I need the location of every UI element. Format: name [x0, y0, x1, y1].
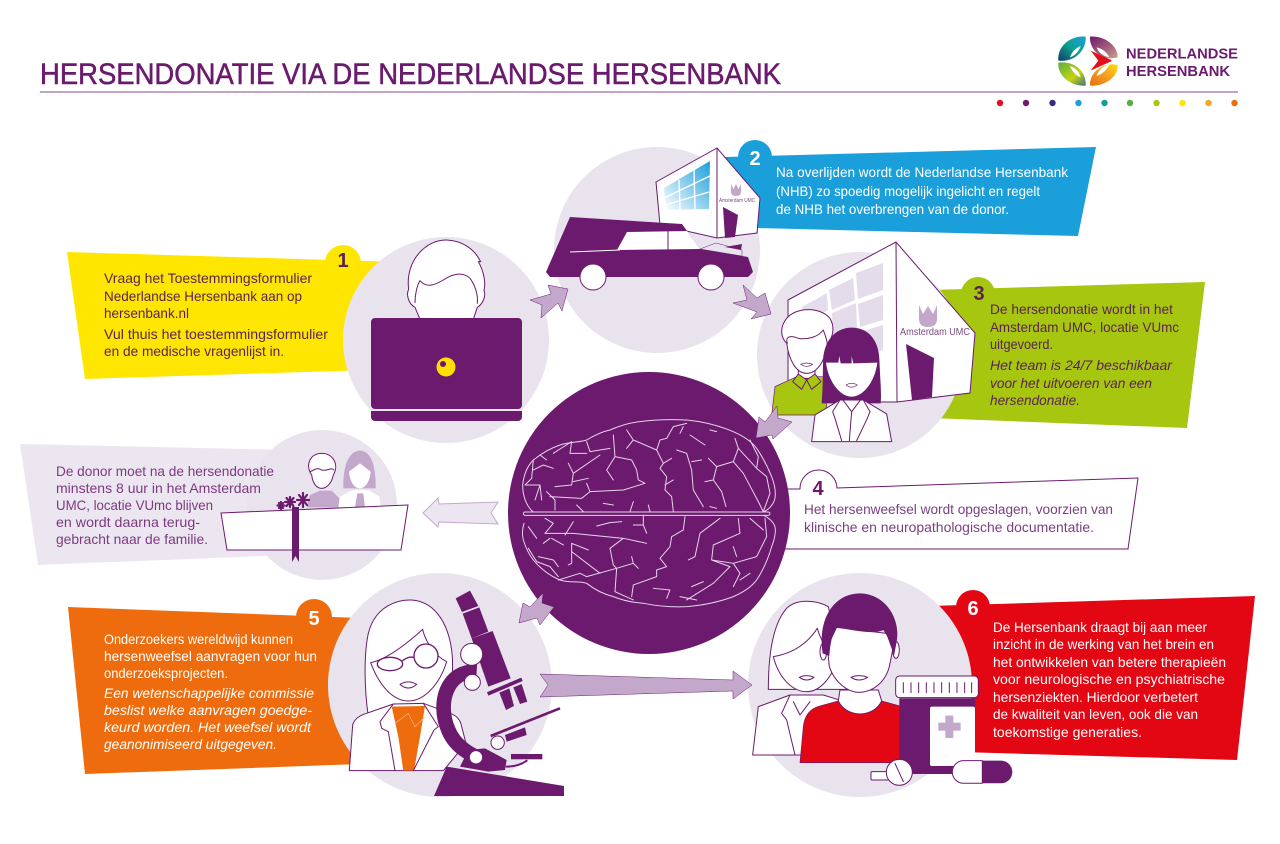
panel 1: yellow callout: Nederlandse Hersenbank aan op — [104, 288, 302, 304]
donor text block: gebracht naar de familie. — [56, 531, 208, 547]
step 3 illustration: hospital and two staff — [757, 242, 975, 458]
panel 5: orange callout: beslist welke aanvragen goedge- — [104, 702, 312, 718]
step 2 illustration: hearse and hospital — [546, 147, 760, 353]
step 2 illustration: hearse and hospital: Amsterdam UMC — [719, 198, 755, 204]
panel 5: orange callout: hersenweefsel aanvragen voor hun — [104, 648, 317, 664]
panel 6: red callout: toekomstige generaties. — [993, 724, 1142, 740]
panel 6: red callout: het ontwikkelen van betere therapieën — [993, 654, 1226, 670]
panel 5: orange callout: 5 — [308, 608, 320, 630]
panel 3: green callout: 3 — [973, 283, 985, 305]
panel 1: yellow callout — [67, 245, 400, 379]
step 4 illustration: brain in purple circle — [508, 372, 790, 654]
panel 4: white outlined callout: Het hersenweefsel wordt opgeslagen, voorzien van — [804, 501, 1113, 517]
step 6 illustration: two people and medication — [748, 573, 1012, 797]
logo: Nederlandse Hersenbank — [1058, 37, 1238, 86]
panel 5: orange callout: Een wetenschappelijke commissie — [104, 685, 314, 701]
title: HERSENDONATIE VIA DE NEDERLANDSE HERSENBANK — [40, 58, 781, 91]
panel 2: blue callout — [725, 140, 1096, 236]
panel 5: orange callout: onderzoeksprojecten. — [104, 665, 228, 681]
step 3 illustration: hospital and two staff: Amsterdam UMC — [900, 326, 970, 338]
panel 6: red callout: de kwaliteit van leven, ook die van — [993, 706, 1198, 722]
panel 5: orange callout: keurd worden. Het weefsel wordt — [104, 719, 312, 735]
panel 2: blue callout: 2 — [749, 148, 761, 170]
donor text block: UMC, locatie VUmc blijven — [56, 497, 213, 513]
panel 2: blue callout: Na overlijden wordt de Nederlandse Hersenbank — [776, 164, 1069, 180]
panel 3: green callout — [930, 277, 1205, 428]
arrow: brain to step 5 — [519, 593, 554, 625]
arrow: step 5 to step 6 — [540, 671, 752, 699]
panel 6: red callout: hersenziekten. Hierdoor verbetert — [993, 689, 1198, 705]
arrow: brain to donor — [423, 498, 498, 527]
panel 3: green callout: hersendonatie. — [990, 392, 1080, 408]
step 5 illustration: researcher and microscope — [328, 573, 564, 797]
panel 6: red callout: 6 — [967, 598, 979, 620]
panel 1: yellow callout: Vraag het Toestemmingsformulier — [104, 270, 312, 286]
donor text block — [56, 463, 274, 547]
logo: Nederlandse Hersenbank: HERSENBANK — [1126, 63, 1230, 80]
arrow: step 2 to step 3 — [733, 285, 771, 319]
panel 1: yellow callout: 1 — [337, 250, 349, 272]
panel 2: blue callout: de NHB het overbrengen van de donor. — [776, 201, 1009, 217]
panel 4: white outlined callout — [770, 470, 1138, 549]
panel 6: red callout — [930, 590, 1255, 760]
panel 6: red callout: voor neurologische en psychiatrische — [993, 671, 1225, 687]
logo: Nederlandse Hersenbank: NEDERLANDSE — [1126, 46, 1238, 62]
arrow: step 1 to step 2 — [530, 285, 568, 318]
panel 5: orange callout: geanonimiseerd uitgegeven. — [104, 736, 277, 752]
donor illustration: family behind coffin — [221, 430, 408, 580]
panel 6: red callout: inzicht in de werking van het brein en — [993, 636, 1214, 652]
panel 3: green callout: uitgevoerd. — [990, 336, 1053, 352]
panel 1: yellow callout: en de medische vragenlijst in. — [104, 343, 284, 359]
panel 3: green callout: Het team is 24/7 beschikbaar — [990, 357, 1173, 373]
panel 3: green callout: De hersendonatie wordt in het — [990, 301, 1173, 317]
panel 2: blue callout: (NHB) zo spoedig mogelijk ingelicht en regelt — [776, 183, 1040, 199]
panel 1: yellow callout: Vul thuis het toestemmingsformulier — [104, 326, 328, 342]
donor text block: minstens 8 uur in het Amsterdam — [56, 480, 261, 496]
panel 5: orange callout: Onderzoekers wereldwijd kunnen — [104, 631, 293, 647]
row of coloured dots — [997, 100, 1238, 106]
panel 4: white outlined callout: 4 — [812, 478, 824, 500]
arrow: step 3 to brain — [756, 406, 792, 439]
panel 3: green callout: Amsterdam UMC, locatie VUmc — [990, 319, 1179, 335]
panel 3: green callout: voor het uitvoeren van een — [990, 375, 1152, 391]
panel 4: white outlined callout: klinische en neuropathologische documentatie. — [804, 519, 1094, 535]
step 1 illustration: person with laptop — [343, 237, 549, 443]
panel 1: yellow callout: hersenbank.nl — [104, 305, 189, 321]
panel 5: orange callout — [68, 599, 360, 774]
donor text block: en wordt daarna terug- — [56, 514, 200, 530]
panel: donor returned, lavender callout — [20, 444, 290, 565]
panel 6: red callout: De Hersenbank draagt bij aan meer — [993, 619, 1207, 635]
donor text block: De donor moet na de hersendonatie — [56, 463, 274, 479]
